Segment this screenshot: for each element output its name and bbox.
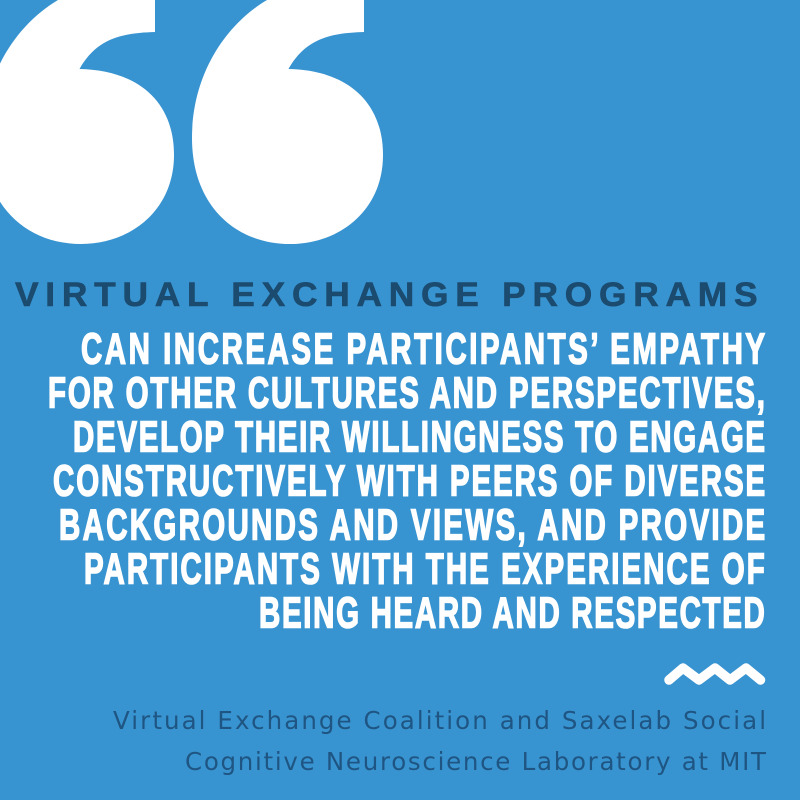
quote text block: FOR OTHER CULTURES AND PERSPECTIVES,	[48, 368, 765, 417]
icon: zigzag wave	[669, 668, 760, 680]
quote text block: BEING HEARD AND RESPECTED	[259, 588, 765, 637]
quote text block: CAN INCREASE PARTICIPANTS’ EMPATHY	[81, 324, 765, 373]
quote text block	[48, 324, 765, 637]
attribution source: Virtual Exchange Coalition and Saxelab Social	[113, 706, 766, 735]
attribution source: Cognitive Neuroscience Laboratory at MIT	[185, 747, 767, 776]
quote text block: BACKGROUNDS AND VIEWS, AND PROVIDE	[59, 500, 765, 549]
attribution source	[113, 706, 767, 776]
quote text block: DEVELOP THEIR WILLINGNESS TO ENGAGE	[73, 412, 765, 461]
heading: VIRTUAL EXCHANGE PROGRAMS	[15, 277, 758, 314]
quote text block: PARTICIPANTS WITH THE EXPERIENCE OF	[84, 544, 765, 593]
icon: large quotation marks	[0, 0, 383, 244]
quote text block: CONSTRUCTIVELY WITH PEERS OF DIVERSE	[53, 456, 765, 505]
